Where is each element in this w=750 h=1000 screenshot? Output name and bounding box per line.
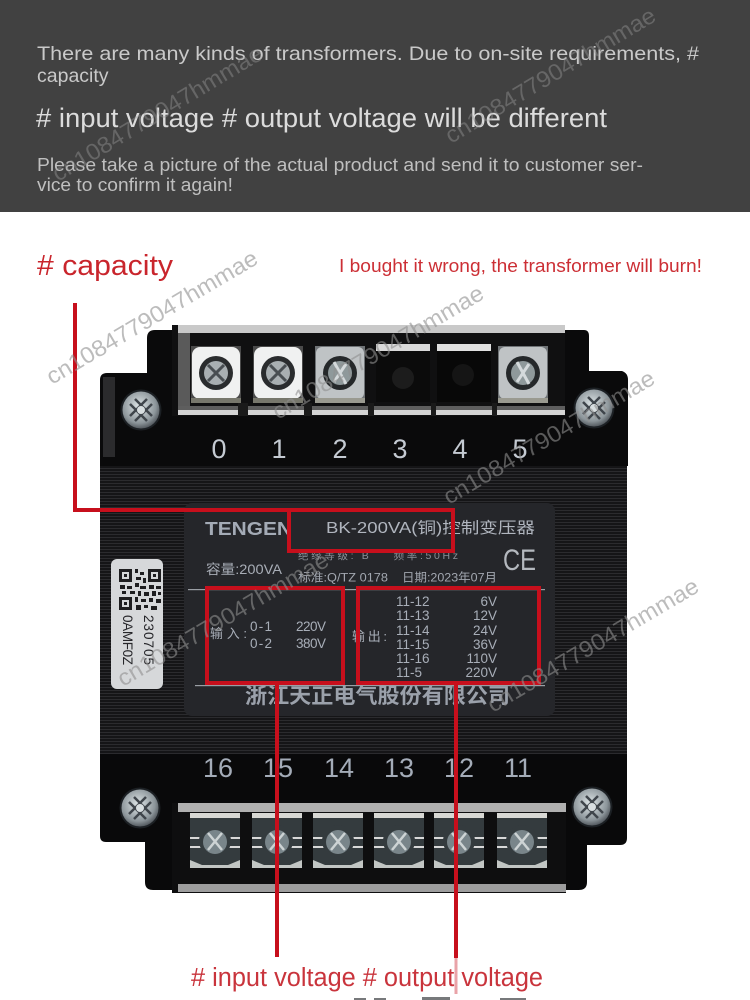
capacity box	[289, 510, 453, 551]
mounting screws bottom	[120, 786, 612, 828]
input table	[210, 619, 326, 651]
output table	[352, 594, 497, 680]
transformer finned body	[100, 460, 627, 760]
bottom terminal numbers: 14	[324, 753, 354, 783]
mounting screws top	[120, 388, 614, 430]
watermarks	[41, 2, 703, 717]
output table: 11-12	[396, 594, 430, 609]
CE mark: CE	[503, 544, 536, 577]
input table: 220V	[296, 619, 326, 634]
top terminal numbers: 3	[392, 434, 408, 464]
output table: 220V	[465, 665, 497, 680]
top terminal numbers: 2	[332, 434, 348, 464]
input table: 0-1	[250, 619, 272, 634]
model: BK-200VA(铜)控制变压器	[326, 519, 536, 537]
output table: 11-15	[396, 637, 430, 652]
output table: 36V	[473, 637, 497, 652]
output table: 110V	[466, 651, 497, 666]
top terminal numbers: 1	[271, 434, 287, 464]
watermarks: cn1084779047hmmae	[440, 2, 660, 148]
top terminal block	[172, 325, 565, 416]
watermarks: cn1084779047hmmae	[482, 573, 703, 717]
output table: 12V	[473, 608, 497, 623]
bottom terminal numbers: 15	[263, 753, 293, 783]
header headline: # input voltage # output voltage will be different	[36, 103, 608, 133]
top bracket	[100, 330, 628, 466]
bottom terminal numbers: 16	[203, 753, 233, 783]
sticker codes: 230705	[141, 615, 156, 665]
footer label: # input voltage # output voltage	[191, 964, 543, 992]
capacity: 容量:200VA	[206, 561, 282, 577]
output table: 11-13	[396, 608, 430, 623]
bottom terminal numbers: 12	[444, 753, 474, 783]
standard: 标准:Q/TZ 0178	[298, 570, 388, 584]
watermarks: cn1084779047hmmae	[41, 245, 262, 389]
transformer product photo	[100, 325, 628, 893]
output voltage leader	[454, 683, 458, 958]
top terminal numbers: 4	[452, 434, 468, 464]
header notice line 1: There are many kinds of transformers. Due to on-site requirements, #	[37, 43, 699, 65]
header note line 2: vice to confirm it again!	[37, 174, 233, 195]
top terminal numbers: 0	[211, 434, 227, 464]
manufacturer: 浙江天正电气股份有限公司	[245, 685, 510, 708]
bottom terminal block	[172, 803, 566, 893]
input table: 0-2	[250, 636, 272, 651]
watermarks: cn1084779047hmmae	[267, 280, 488, 424]
watermarks: cn1084779047hmmae	[112, 547, 333, 691]
bottom terminal numbers: 13	[384, 753, 414, 783]
header banner	[0, 0, 750, 212]
brand: TENGEN	[205, 519, 292, 539]
output table: 11-16	[396, 651, 430, 666]
nameplate	[184, 503, 555, 716]
output voltage box	[358, 588, 539, 683]
bottom terminal numbers: 11	[504, 753, 532, 783]
QR sticker: 0AMF0Z	[120, 615, 135, 665]
output table: 输出:	[352, 629, 387, 644]
output voltage leader fade	[454, 958, 458, 994]
header note line 1: Please take a picture of the actual product and send it to customer ser-	[37, 154, 643, 175]
top terminal numbers	[211, 434, 528, 464]
QR sticker	[111, 559, 163, 689]
capacity leader line	[75, 303, 290, 510]
watermarks: cn1084779047hmmae	[47, 40, 267, 186]
output table: 24V	[473, 623, 497, 638]
red callout lines and boxes	[75, 303, 539, 994]
input voltage leader	[275, 683, 279, 957]
bottom bracket	[100, 754, 627, 890]
watermarks: cn1084779047hmmae	[438, 365, 659, 509]
input table: 380V	[296, 636, 326, 651]
heading: capacity: # capacity	[37, 250, 174, 282]
top terminal numbers: 5	[512, 434, 528, 464]
insulation and frequency: 绝缘等级: B 频率:50Hz	[298, 549, 458, 562]
input voltage box	[207, 588, 343, 683]
cut-off text at bottom edge	[354, 997, 526, 1000]
date: 日期:2023年07月	[402, 570, 497, 584]
output table: 11-5	[396, 665, 422, 680]
input table: 输入:	[210, 626, 247, 641]
output table: 11-14	[396, 623, 430, 638]
bottom terminal numbers	[203, 753, 532, 783]
header notice line 2: capacity	[37, 65, 109, 87]
warning text: I bought it wrong, the transformer will burn!	[339, 256, 702, 276]
output table: 6V	[480, 594, 497, 609]
